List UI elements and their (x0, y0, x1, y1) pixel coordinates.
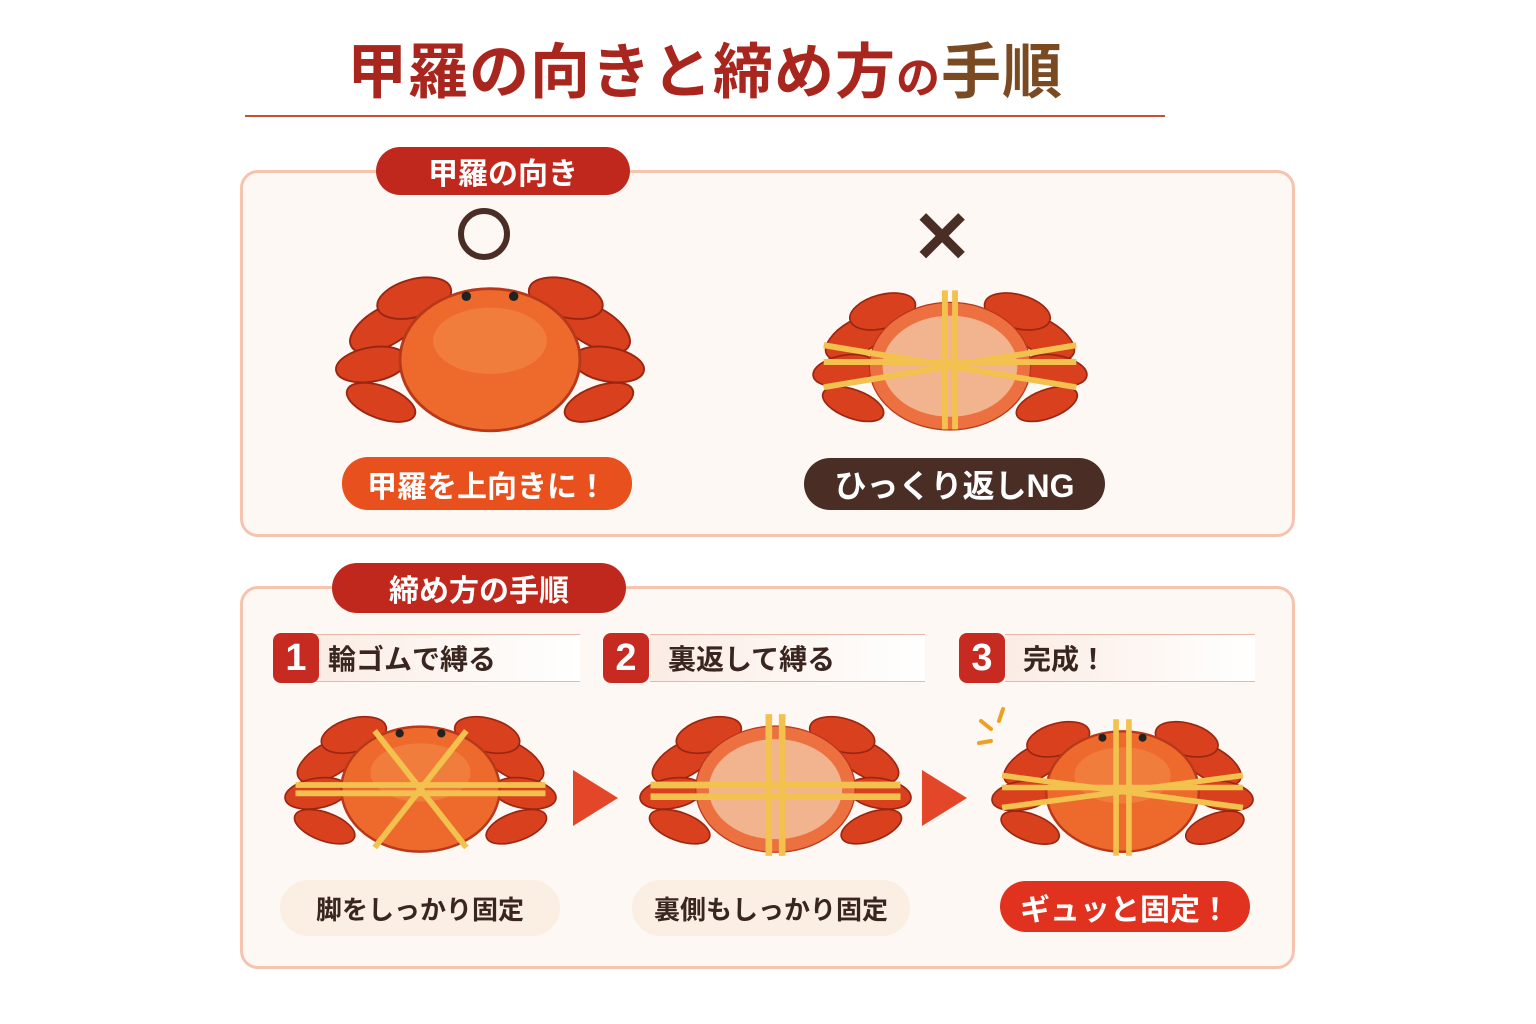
crab: step 1 (284, 716, 557, 853)
caption 1: 脚をしっかり固定 (316, 894, 524, 924)
arrow 2 (922, 770, 967, 826)
step 2 header: 裏返して縛る (668, 644, 835, 675)
number 3 (959, 633, 1005, 683)
step 3 header (1005, 634, 1255, 682)
caption 3: ギュッと固定！ (1020, 894, 1230, 926)
title: 甲羅の向きと締め方の手順 (347, 39, 1063, 106)
callout: upright: 甲羅を上向きに！ (367, 470, 607, 504)
callout: upright (342, 457, 632, 510)
callout: NG: ひっくり返しNG (834, 468, 1074, 504)
icon: sparkle (977, 707, 1006, 745)
crab: flipped NG (812, 290, 1088, 431)
number 2: 2 (615, 636, 637, 678)
heading: steps: 締め方の手順 (389, 575, 569, 608)
callout: NG (804, 458, 1105, 510)
number 1: 1 (285, 636, 307, 678)
panel: steps (240, 586, 1295, 969)
crab: step 2 (639, 714, 912, 856)
caption 2 (632, 880, 910, 936)
icon: circle OK (458, 208, 510, 260)
caption 2: 裏側もしっかり固定 (654, 894, 888, 924)
crab: step 3 (991, 719, 1254, 856)
number 3: 3 (971, 636, 993, 678)
number 1 (273, 633, 319, 683)
heading: orientation: 甲羅の向き (428, 158, 578, 191)
caption 3 (1000, 881, 1250, 932)
icon: cross NG: ✕ (912, 198, 972, 278)
step 1 header (310, 634, 580, 682)
step 2 header (650, 634, 925, 682)
panel: orientation (240, 170, 1295, 537)
step 1 header: 輪ゴムで縛る (328, 644, 496, 675)
heading: steps (332, 563, 626, 613)
number 2 (603, 633, 649, 683)
step 3 header: 完成！ (1023, 644, 1107, 675)
caption 1 (280, 880, 560, 936)
crab: upright (335, 276, 645, 432)
arrow 1 (573, 770, 618, 826)
heading: orientation (376, 147, 630, 195)
